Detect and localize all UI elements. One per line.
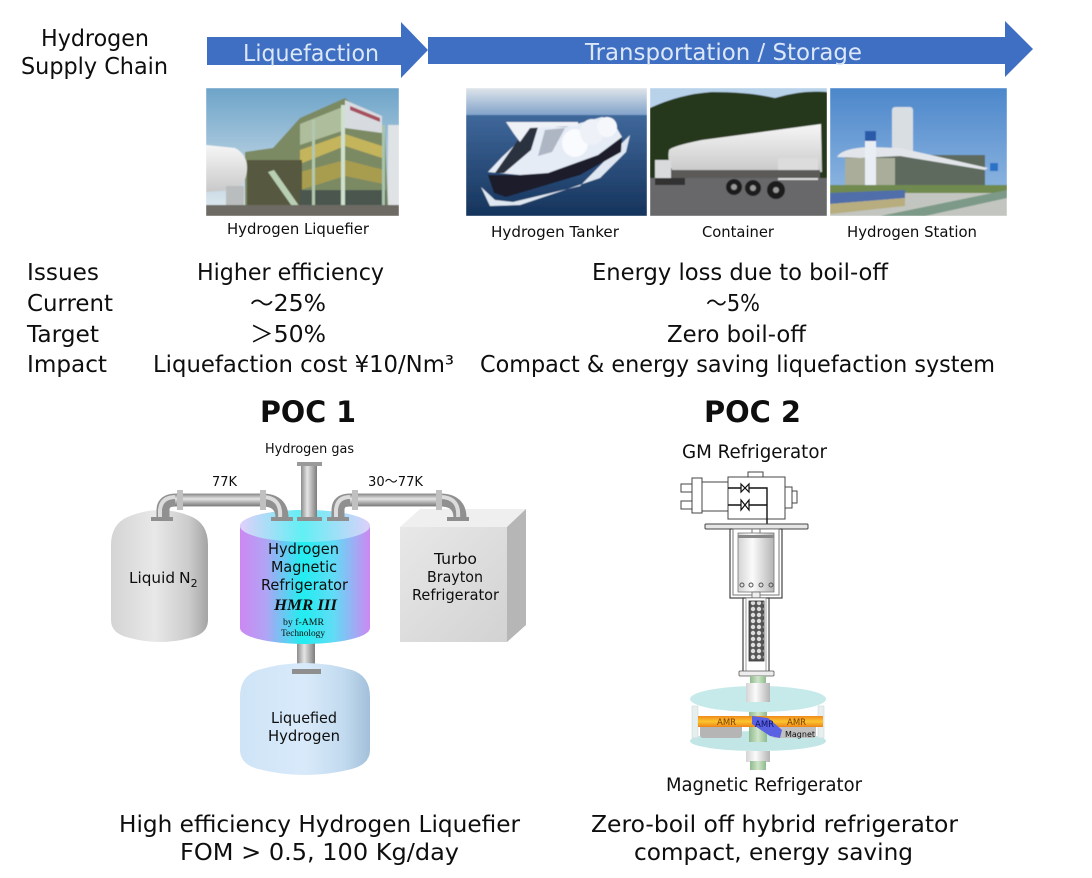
table: row labels: Current xyxy=(27,291,113,317)
caption: POC 1 summary: High efficiency Hydrogen Liquefier xyxy=(119,812,521,838)
label: GM Refrigerator: GM Refrigerator xyxy=(682,441,827,463)
component: regenerator tube xyxy=(739,598,774,676)
label: 30~77K: 30～77K xyxy=(368,474,424,490)
table: liquefaction column: ＞50% xyxy=(250,322,326,348)
table: row labels: Issues xyxy=(27,260,99,286)
caption: POC 1 summary xyxy=(119,812,521,866)
label: 77K: 77K xyxy=(212,474,238,490)
pipe: hydrogen gas inlet xyxy=(297,462,322,521)
table: transportation column xyxy=(480,260,995,378)
caption: Hydrogen Liquefier: Hydrogen Liquefier xyxy=(227,220,370,238)
caption: POC 1 summary: FOM > 0.5, 100 Kg/day xyxy=(180,840,459,866)
photo: container truck xyxy=(650,88,827,216)
component: magnetic refrigerator stage: AMR xyxy=(717,718,736,728)
heading: POC 1: POC 1 xyxy=(260,395,356,429)
pipe: 30~77K line xyxy=(327,490,469,521)
label: Hydrogen gas: Hydrogen gas xyxy=(265,441,354,457)
caption: POC 2 summary xyxy=(591,812,959,866)
table: transportation column: ～5% xyxy=(706,291,760,317)
tank: Liquefied Hydrogen: Hydrogen xyxy=(268,727,340,745)
heading: POC 2: POC 2 xyxy=(704,395,801,429)
table: row labels xyxy=(26,260,113,378)
heading: Hydrogen Supply Chain: Supply Chain xyxy=(21,54,168,80)
tank: Liquefied Hydrogen: Liquefied xyxy=(271,709,337,727)
photo: hydrogen station xyxy=(830,88,1007,216)
caption: POC 2 summary: Zero-boil off hybrid refrigerator xyxy=(591,812,959,838)
photo: hydrogen tanker ship xyxy=(466,88,647,216)
photo: hydrogen liquefier plant xyxy=(206,88,399,216)
tank: Liquid N2: 2 xyxy=(191,577,198,590)
vessel: Hydrogen Magnetic Refrigerator HMR III: Hydrogen xyxy=(268,540,339,558)
table: liquefaction column: Liquefaction cost ¥10/Nm³ xyxy=(153,352,454,378)
heading: Hydrogen Supply Chain: Hydrogen xyxy=(41,26,149,52)
table: transportation column: Energy loss due to boil-off xyxy=(592,260,889,286)
component: magnetic refrigerator stage: AMR xyxy=(787,718,806,728)
vessel: Hydrogen Magnetic Refrigerator HMR III: HMR III xyxy=(273,597,338,614)
component: magnetic refrigerator stage xyxy=(690,676,826,770)
arrow: Transportation / Storage: Transportation / Storage xyxy=(584,40,862,66)
caption: Container: Container xyxy=(702,223,775,241)
vessel: Hydrogen Magnetic Refrigerator HMR III: Refrigerator xyxy=(261,576,349,594)
vessel: Hydrogen Magnetic Refrigerator HMR III: Technology xyxy=(281,629,325,639)
table: transportation column: Compact & energy saving liquefaction system xyxy=(480,352,995,378)
tank: Liquid N2: N xyxy=(179,569,191,587)
component: cylinder housing xyxy=(730,529,782,600)
vessel: Hydrogen Magnetic Refrigerator HMR III: by f-AMR xyxy=(283,617,325,628)
caption: POC 2 summary: compact, energy saving xyxy=(634,840,913,866)
table: liquefaction column: ～25% xyxy=(250,291,326,317)
arrow: Transportation / Storage xyxy=(428,21,1033,77)
table: row labels: Impact xyxy=(27,352,107,378)
arrow: Liquefaction xyxy=(207,22,428,78)
table: liquefaction column xyxy=(153,260,454,378)
tank: Liquid N2 xyxy=(111,510,208,642)
label: Magnetic Refrigerator: Magnetic Refrigerator xyxy=(666,774,862,796)
tank: Liquid N2: Liquid xyxy=(129,569,175,587)
box: Turbo Brayton Refrigerator xyxy=(400,509,526,642)
table: transportation column: Zero boil-off xyxy=(667,322,807,348)
component: magnetic refrigerator stage: AMR xyxy=(755,720,774,730)
tank: Liquefied Hydrogen xyxy=(240,663,370,775)
caption: Hydrogen Tanker: Hydrogen Tanker xyxy=(491,223,620,241)
caption: Hydrogen Station: Hydrogen Station xyxy=(847,223,977,241)
vessel: Hydrogen Magnetic Refrigerator HMR III xyxy=(240,510,370,644)
table: liquefaction column: Higher efficiency xyxy=(197,260,384,286)
pipe: bottom connection xyxy=(297,638,315,672)
vessel: Hydrogen Magnetic Refrigerator HMR III: Magnetic xyxy=(271,558,337,576)
heading: Hydrogen Supply Chain xyxy=(21,26,168,80)
box: Turbo Brayton Refrigerator: Brayton xyxy=(427,568,483,586)
diagram: POC 1 liquefier system xyxy=(111,441,526,775)
table: row labels: Target xyxy=(26,322,99,348)
pipe: 77K line xyxy=(151,490,293,521)
component: GM cold head xyxy=(681,472,808,529)
box: Turbo Brayton Refrigerator: Refrigerator xyxy=(412,586,500,604)
arrow: Liquefaction: Liquefaction xyxy=(243,41,379,67)
component: magnetic refrigerator stage: Magnet xyxy=(785,730,815,739)
diagram: POC 2 hybrid refrigerator xyxy=(681,472,826,770)
box: Turbo Brayton Refrigerator: Turbo xyxy=(433,550,477,568)
